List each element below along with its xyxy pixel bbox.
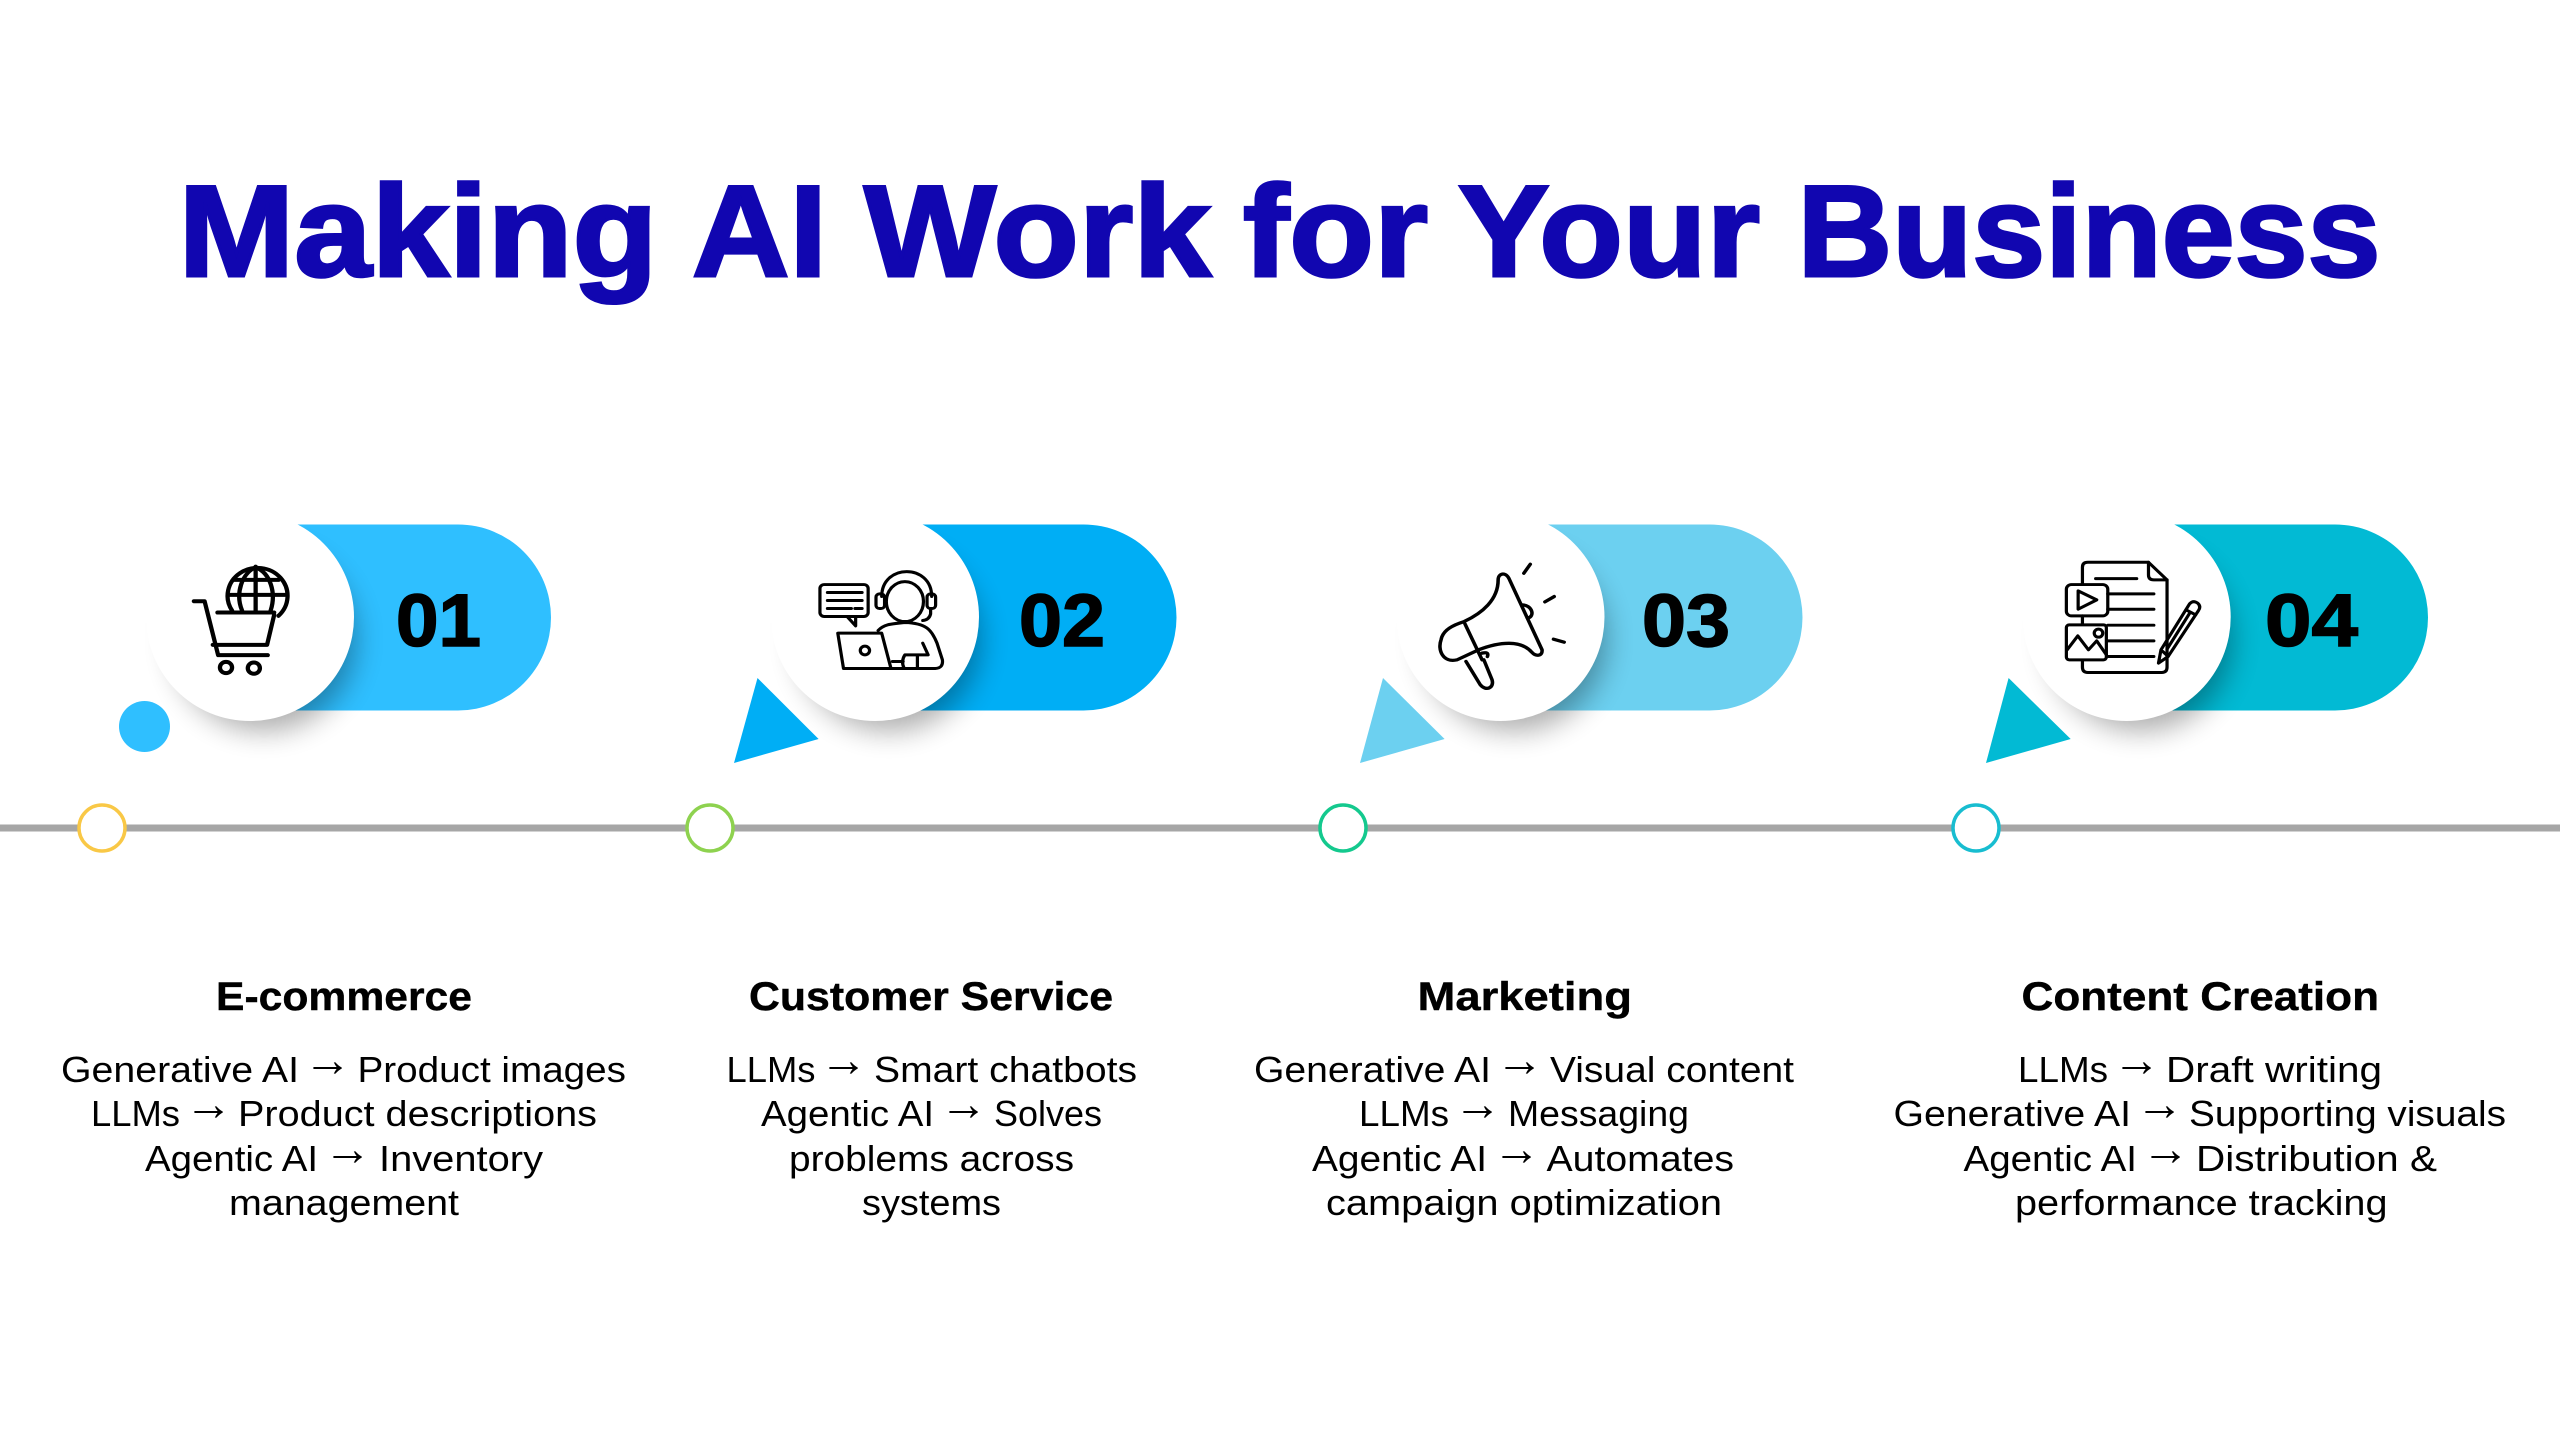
- text block: Customer Service uses: Solves: [994, 1093, 1102, 1134]
- icon: document with media and pencil: [2066, 562, 2200, 672]
- pill 03: [1400, 524, 1802, 710]
- text block: Marketing uses: Visual content: [1550, 1049, 1794, 1090]
- text block: E-commerce uses: Inventory: [379, 1138, 543, 1179]
- number 01: 01: [396, 579, 481, 662]
- text block: Content Creation uses: Supporting visuals: [2189, 1093, 2506, 1134]
- title: Your: [1458, 158, 1760, 304]
- step 04 badge: [1986, 513, 2428, 763]
- title: Work: [864, 158, 1212, 304]
- marker: triangle 04: [1986, 678, 2071, 763]
- text block: Content Creation uses: Generative AI: [1894, 1093, 2131, 1134]
- heading: E-commerce: E-commerce: [216, 975, 472, 1019]
- text block: Marketing uses: →: [1496, 1034, 1544, 1087]
- timeline marker 4: [1953, 805, 1999, 851]
- text block: Customer Service uses: problems across: [789, 1138, 1074, 1179]
- text block: Marketing uses: campaign optimization: [1326, 1182, 1722, 1223]
- title: Making: [178, 158, 658, 304]
- text block: Marketing uses: →: [1492, 1123, 1540, 1176]
- text block: Customer Service uses: [726, 1034, 1137, 1223]
- timeline marker 3: [1320, 805, 1366, 851]
- marker: triangle 03: [1360, 678, 1445, 763]
- icon: megaphone: [1440, 564, 1564, 688]
- text block: Marketing uses: LLMs: [1359, 1093, 1449, 1134]
- text block: E-commerce uses: →: [184, 1078, 232, 1131]
- text block: E-commerce uses: [61, 1034, 626, 1223]
- text block: Content Creation uses: [1894, 1034, 2506, 1223]
- text block: Content Creation uses: Draft writing: [2166, 1049, 2382, 1090]
- column: E-commerce: [61, 975, 626, 1223]
- column: Customer Service: [726, 975, 1137, 1223]
- step 01 badge: [119, 513, 551, 752]
- marker: dot: [119, 701, 170, 752]
- heading: Marketing: Marketing: [1418, 975, 1632, 1019]
- text block: Marketing uses: Agentic AI: [1312, 1138, 1487, 1179]
- icon: shopping cart with globe: [194, 567, 288, 674]
- marker: triangle 02: [734, 678, 819, 763]
- text block: E-commerce uses: LLMs: [91, 1093, 180, 1134]
- text block: Marketing uses: Messaging: [1508, 1093, 1689, 1134]
- heading: Customer Service: Customer Service: [749, 975, 1113, 1019]
- text block: Customer Service uses: Agentic AI: [761, 1093, 934, 1134]
- text block: Content Creation uses: Agentic AI: [1964, 1138, 2137, 1179]
- icon circle 01: [146, 513, 356, 731]
- text block: Marketing uses: Generative AI: [1254, 1049, 1491, 1090]
- text block: Customer Service uses: LLMs: [726, 1049, 816, 1090]
- text block: Customer Service uses: →: [820, 1034, 868, 1087]
- icon circle 03: [1396, 513, 1606, 731]
- text block: E-commerce uses: Product descriptions: [238, 1093, 597, 1134]
- icon circle 04: [2023, 513, 2233, 731]
- text block: Content Creation uses: performance tracking: [2015, 1182, 2388, 1223]
- pill 04: [2027, 524, 2428, 710]
- text block: E-commerce uses: Generative AI: [61, 1049, 299, 1090]
- column: Content Creation: [1894, 975, 2506, 1223]
- column: Marketing: [1254, 975, 1794, 1223]
- title: Business: [1798, 158, 2380, 304]
- text block: Content Creation uses: →: [2142, 1123, 2190, 1176]
- text block: Customer Service uses: Smart chatbots: [874, 1049, 1137, 1090]
- title: [178, 158, 2380, 304]
- text block: Content Creation uses: →: [2112, 1034, 2160, 1087]
- icon: support agent with laptop: [820, 572, 943, 668]
- text block: Customer Service uses: systems: [862, 1182, 1001, 1223]
- number 04: 04: [2265, 579, 2358, 662]
- pill 01: [150, 524, 551, 710]
- text block: E-commerce uses: management: [229, 1182, 459, 1223]
- text block: E-commerce uses: Agentic AI: [145, 1138, 318, 1179]
- title: AI: [692, 158, 827, 304]
- heading: Content Creation: Content Creation: [2022, 975, 2379, 1019]
- number 02: 02: [1019, 579, 1105, 662]
- text block: Marketing uses: [1254, 1034, 1794, 1223]
- text block: Customer Service uses: →: [940, 1078, 988, 1131]
- timeline marker 1: [79, 805, 125, 851]
- text block: Marketing uses: Automates: [1546, 1138, 1734, 1179]
- text block: E-commerce uses: →: [324, 1123, 372, 1176]
- text block: Content Creation uses: Distribution &: [2196, 1138, 2437, 1179]
- step 03 badge: [1360, 513, 1802, 763]
- pill 02: [775, 524, 1176, 710]
- title: for: [1243, 158, 1428, 304]
- icon circle 02: [771, 513, 981, 731]
- text block: E-commerce uses: →: [304, 1034, 352, 1087]
- text block: E-commerce uses: Product images: [358, 1049, 626, 1090]
- text block: Content Creation uses: LLMs: [2018, 1049, 2108, 1090]
- number 03: 03: [1642, 579, 1730, 662]
- text block: Content Creation uses: →: [2136, 1078, 2184, 1131]
- text block: Marketing uses: →: [1454, 1078, 1502, 1131]
- step 02 badge: [734, 513, 1176, 763]
- timeline line: [0, 824, 2560, 832]
- timeline marker 2: [687, 805, 733, 851]
